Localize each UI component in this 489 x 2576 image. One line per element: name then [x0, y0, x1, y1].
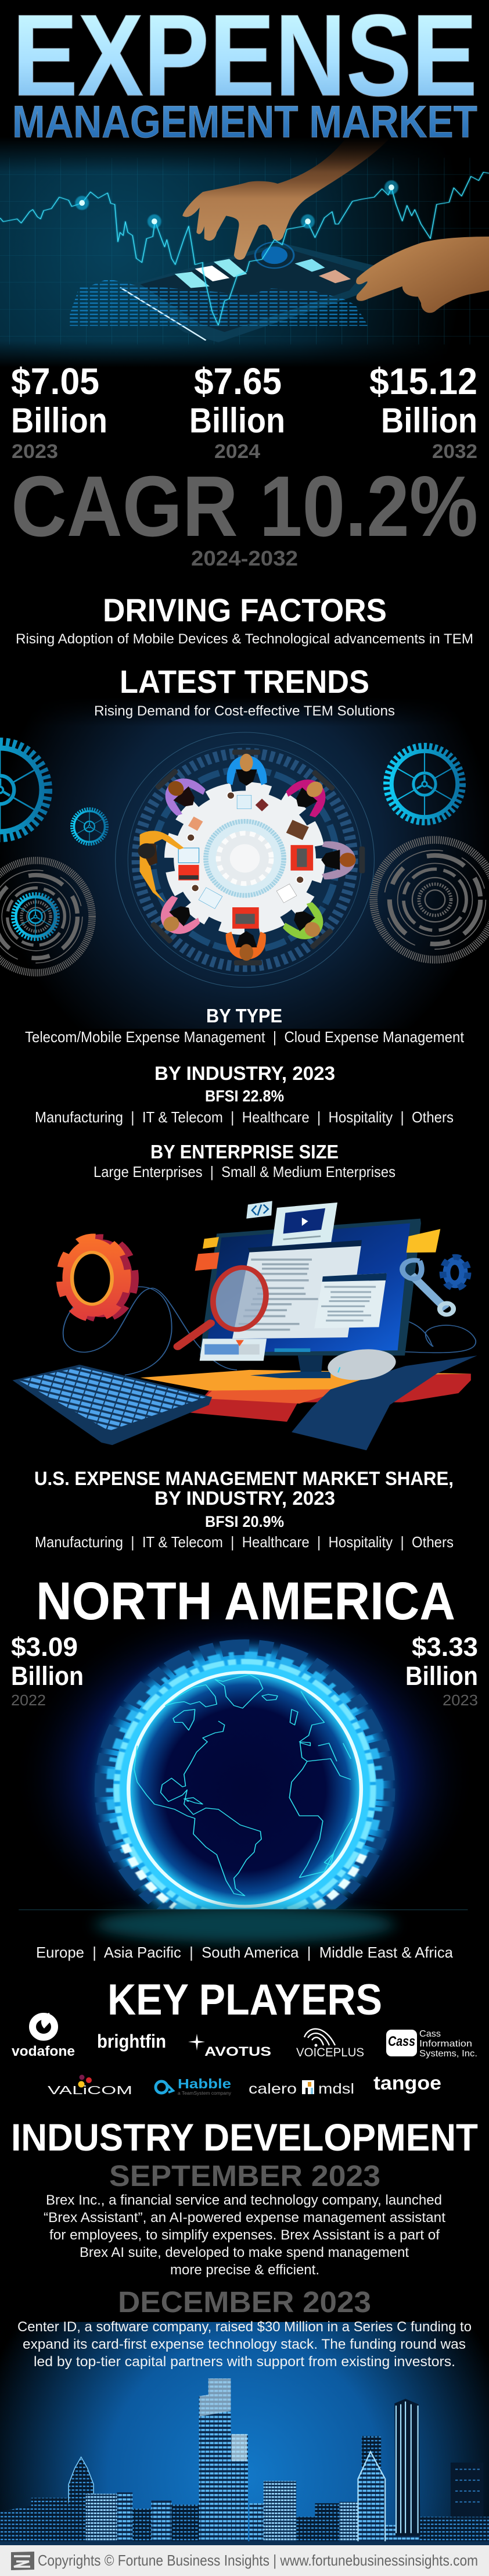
logo: avotus	[188, 2034, 271, 2059]
U.S. market share block: U.S. EXPENSE MANAGEMENT MARKET SHARE,	[34, 1468, 454, 1489]
far buildings	[0, 2457, 489, 2545]
development: September 2023	[44, 2159, 445, 2278]
logo: cass	[386, 2029, 477, 2059]
stat 2024	[189, 360, 285, 463]
wires	[63, 1285, 476, 1375]
document window	[232, 1240, 362, 1339]
segment: by type	[25, 1005, 465, 1046]
development: December 2023: expand its card-first expense technology stack. The funding round was	[23, 2337, 466, 2352]
footer	[0, 2545, 489, 2576]
mouse	[325, 1346, 398, 1383]
logo: cass: Cass	[388, 2034, 415, 2049]
gears	[0, 743, 489, 973]
second window	[314, 1273, 387, 1328]
team table illustration	[0, 697, 489, 1029]
code icon	[246, 1201, 272, 1219]
chart glow dots	[75, 180, 398, 228]
magnifying glass	[178, 1265, 271, 1347]
title	[12, 0, 477, 147]
table rings	[116, 732, 374, 988]
stat 2023: Billion	[11, 401, 107, 440]
logo: valicom	[48, 2075, 132, 2097]
colour tags	[195, 1229, 440, 1271]
segment: by industry: BY INDUSTRY, 2023	[154, 1062, 335, 1084]
person: magenta	[284, 766, 340, 820]
driving factors: DRIVING FACTORS	[103, 592, 387, 628]
latest trends: LATEST TRENDS	[120, 663, 369, 700]
stat 2023: 2023	[12, 441, 58, 463]
development: September 2023: SEPTEMBER 2023	[109, 2159, 380, 2192]
segment: by type: Telecom/Mobile Expense Management | Cloud Expense Management	[25, 1028, 465, 1046]
key player logos	[12, 2013, 477, 2097]
slider panel	[200, 1339, 267, 1361]
latest trends: Rising Demand for Cost-effective TEM Solutions	[94, 703, 395, 719]
segment: by enterprise size	[94, 1141, 395, 1180]
logo: habble: Habble	[178, 2076, 231, 2091]
logo: cass: Systems, Inc.	[419, 2049, 477, 2059]
segment: by enterprise size: BY ENTERPRISE SIZE	[150, 1141, 339, 1162]
development: December 2023	[17, 2285, 472, 2370]
segment: by type: BY TYPE	[206, 1005, 282, 1026]
city skyline	[0, 2322, 489, 2546]
regional stat 2023	[405, 1632, 478, 1709]
tablet	[120, 242, 384, 342]
mouse pad	[292, 1355, 477, 1450]
key players heading: KEY PLAYERS	[107, 1975, 382, 2024]
logo: calero mdsl	[249, 2080, 354, 2097]
lower hand	[356, 237, 489, 313]
tall lined tower	[394, 2399, 420, 2536]
logo: valicom: VALiCOM	[48, 2084, 132, 2097]
person: yellow standing	[138, 831, 184, 903]
regional stat 2022: Billion	[11, 1661, 84, 1691]
latest trends	[94, 663, 395, 719]
logo: calero mdsl: calero	[249, 2081, 297, 2097]
person: blue	[227, 750, 267, 786]
regional stat 2022	[11, 1632, 84, 1709]
orange gear	[62, 1239, 132, 1317]
main tower	[199, 2378, 231, 2545]
development: December 2023: Center ID, a software company, raised $30 Million in a Series C funding to	[17, 2319, 472, 2335]
stat 2023: $7.05	[11, 360, 99, 402]
stat 2024: 2024	[214, 441, 260, 463]
wrench	[402, 1260, 454, 1315]
video window	[272, 1203, 337, 1246]
logo: calero mdsl: mdsl	[318, 2081, 354, 2097]
market size figures	[11, 360, 477, 463]
segment: by industry	[35, 1062, 454, 1126]
segment: by enterprise size: Large Enterprises | Small & Medium Enterprises	[94, 1163, 395, 1180]
stat 2024: Billion	[189, 401, 285, 440]
logo: avotus: AVOTUS	[204, 2044, 271, 2059]
development: September 2023: more precise & efficient.	[170, 2262, 319, 2278]
regional stat 2023: Billion	[405, 1661, 478, 1691]
logo: cass: Cass	[419, 2029, 441, 2039]
logo: tangoe: tangoe	[373, 2072, 441, 2094]
regional stat 2023: 2023	[443, 1691, 478, 1709]
person: green	[281, 900, 338, 954]
development: September 2023: Brex Inc., a financial service and technology company, launched	[46, 2192, 442, 2208]
stat 2032: Billion	[381, 401, 477, 440]
logo: voiceplus	[296, 2029, 364, 2059]
stat 2032: 2032	[432, 441, 477, 463]
driving factors	[16, 592, 473, 647]
U.S. market share block: BY INDUSTRY, 2023	[154, 1487, 335, 1509]
regional stat 2022: 2022	[11, 1691, 46, 1709]
development: September 2023: “Brex Assistant”, an AI-powered expense management assistant	[44, 2210, 445, 2226]
footer logo	[11, 2552, 34, 2570]
white gear table	[170, 786, 320, 930]
ring highlights	[125, 1844, 364, 1906]
curved tower	[264, 2481, 296, 2545]
person: light blue and violet	[150, 764, 208, 818]
glowing globe	[0, 1601, 489, 1976]
person: purple and tan	[321, 841, 365, 879]
blue gear	[443, 1257, 468, 1288]
outer glow rings	[104, 1647, 386, 1931]
stat 2032	[369, 360, 477, 463]
upper hand	[182, 138, 390, 260]
stat 2032: $15.12	[369, 360, 477, 402]
development: December 2023: led by top-tier capital partners with support from existing investors.	[34, 2354, 455, 2370]
monitor	[200, 1219, 421, 1378]
right tower with spire	[358, 2436, 385, 2545]
development: December 2023: DECEMBER 2023	[118, 2285, 371, 2319]
development: September 2023: Brex AI suite, developed to make spend management	[80, 2245, 409, 2260]
keyboard	[12, 1365, 212, 1445]
logo: vodafone	[12, 2013, 75, 2059]
desk	[141, 1370, 471, 1422]
driving factors: Rising Adoption of Mobile Devices & Technological advancements in TEM	[16, 631, 473, 647]
equalizer bars	[69, 280, 368, 325]
stat 2024: $7.65	[194, 360, 282, 402]
logo: habble	[156, 2076, 231, 2096]
continent outlines	[134, 1675, 353, 1896]
segment: by industry: Manufacturing | IT & Telecom | Healthcare | Hospitality | Others	[35, 1108, 454, 1126]
logo: vodafone: vodafone	[12, 2044, 75, 2059]
logo: habble: a TeamSystem company	[178, 2091, 231, 2096]
other regions: Europe | Asia Pacific | South America | Middle East & Africa	[36, 1944, 454, 1961]
chart line	[0, 172, 489, 325]
logo: voiceplus: VOICEPLUS	[296, 2046, 364, 2059]
regional stat 2023: $3.33	[412, 1632, 478, 1662]
ground	[0, 1909, 489, 1976]
regional stat 2022: $3.09	[11, 1632, 78, 1662]
logo: cass: Information	[419, 2039, 472, 2049]
computer illustration	[12, 1201, 477, 1450]
U.S. market share block: BFSI 20.9%	[205, 1513, 284, 1530]
CAGR period: 2024-2032	[191, 546, 298, 570]
hero image: hands on tablet with stock chart	[0, 137, 489, 367]
U.S. market share block: Manufacturing | IT & Telecom | Healthcare | Hospitality | Others	[35, 1533, 454, 1551]
person: pink	[145, 894, 202, 948]
second tower	[231, 2434, 248, 2545]
table items	[178, 792, 313, 929]
segment: by industry: BFSI 22.8%	[205, 1087, 284, 1105]
stat 2023	[11, 360, 107, 463]
U.S. market share block	[34, 1468, 454, 1551]
regional heading: North America: NORTH AMERICA	[36, 1572, 455, 1631]
logo: brightfin: brightfin	[97, 2031, 166, 2052]
development: September 2023: for employees, to simplify expenses. Brex Assistant is a part of	[49, 2227, 440, 2243]
person: orange	[226, 931, 266, 965]
